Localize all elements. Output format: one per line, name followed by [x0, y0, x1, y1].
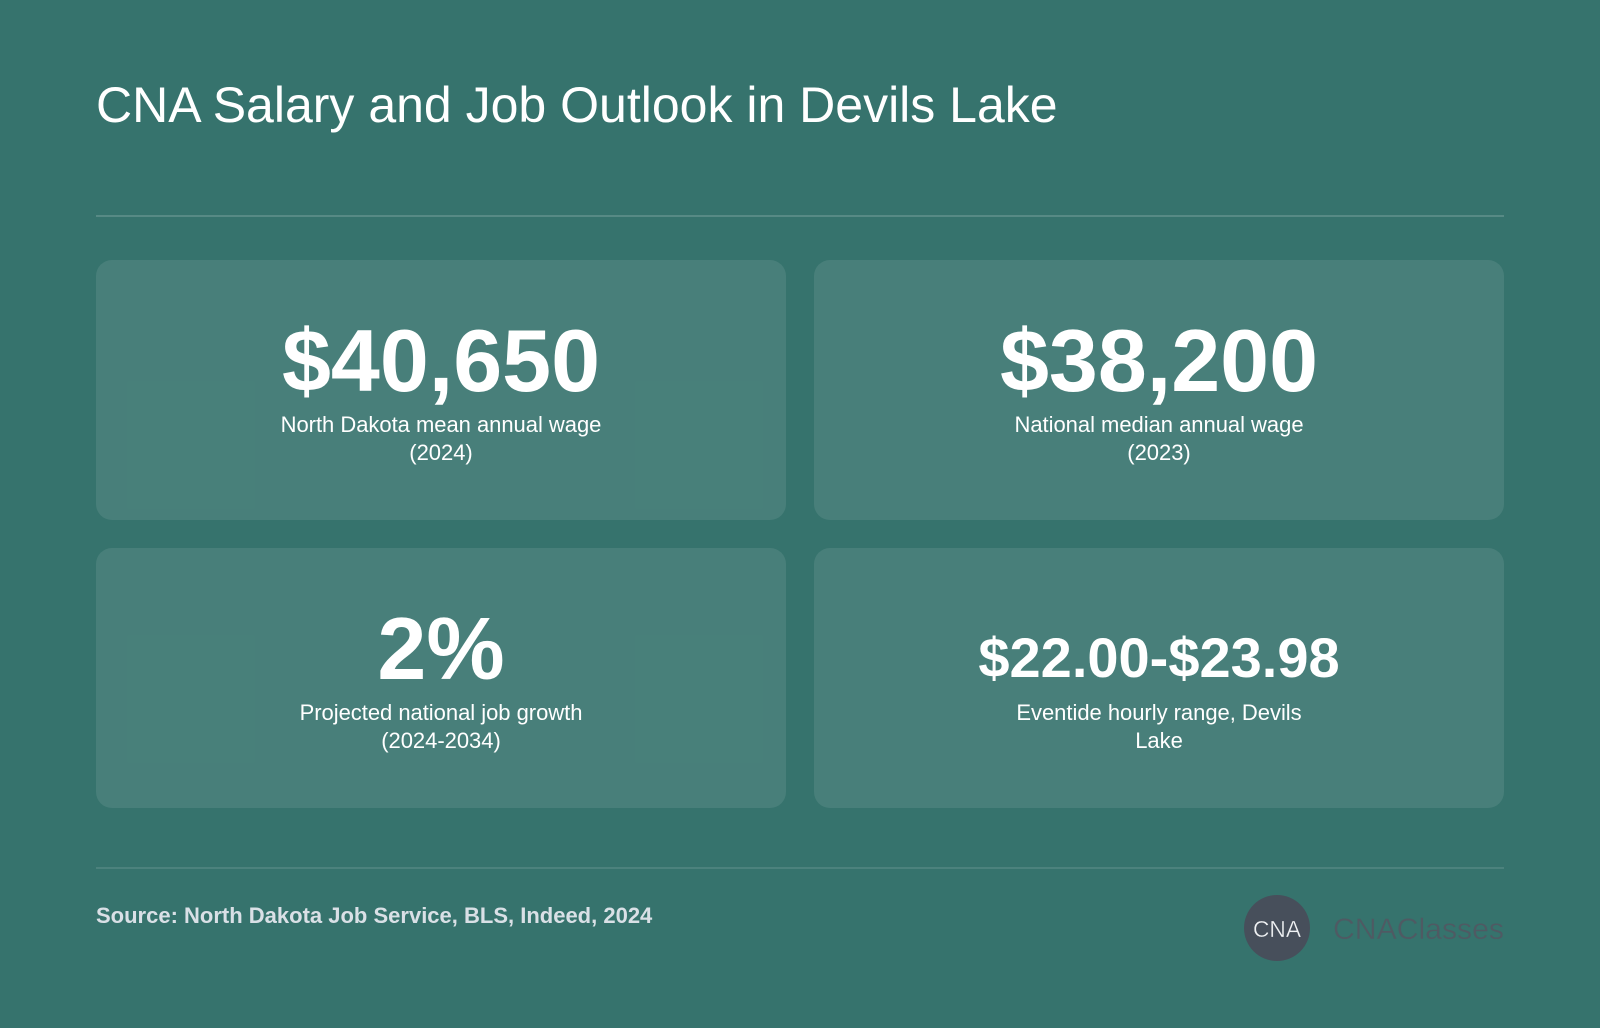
label: Eventide hourly range — [1016, 700, 1302, 753]
label: Projected national job growth: (2024-2034) — [381, 728, 501, 753]
label: Eventide hourly range: Lake — [1135, 728, 1183, 753]
panel: projected job growth — [96, 548, 786, 808]
label: North Dakota mean annual wage: North Dakota mean annual wage — [281, 412, 601, 437]
label: National median annual wage — [1014, 412, 1304, 465]
logo badge: CNA — [1253, 916, 1302, 942]
panel: national median wage — [814, 260, 1504, 520]
logo: CNAClasses — [1244, 895, 1504, 961]
source note: Source: North Dakota Job Service, BLS, Indeed, 2024 — [96, 903, 652, 928]
panel: North Dakota mean wage — [96, 260, 786, 520]
label: North Dakota mean annual wage: (2024) — [409, 440, 473, 465]
label: North Dakota mean annual wage — [281, 412, 601, 465]
label: National median annual wage: National median annual wage — [1014, 412, 1304, 437]
label: National median annual wage: (2023) — [1127, 440, 1191, 465]
title: CNA Salary and Job Outlook in Devils Lake — [96, 77, 1058, 133]
value: $40,650: $40,650 — [282, 311, 600, 410]
logo badge — [1244, 895, 1310, 961]
value: $38,200: $38,200 — [1000, 311, 1318, 410]
logo wordmark: CNAClasses — [1333, 913, 1504, 946]
label: Eventide hourly range: Eventide hourly range, Devils — [1016, 700, 1302, 725]
value: $22.00-$23.98: $22.00-$23.98 — [978, 626, 1340, 689]
panel: Eventide hourly range — [814, 548, 1504, 808]
label: Projected national job growth: Projected national job growth — [300, 700, 582, 725]
label: Projected national job growth — [300, 700, 582, 753]
value: 2%: 2% — [377, 599, 505, 698]
